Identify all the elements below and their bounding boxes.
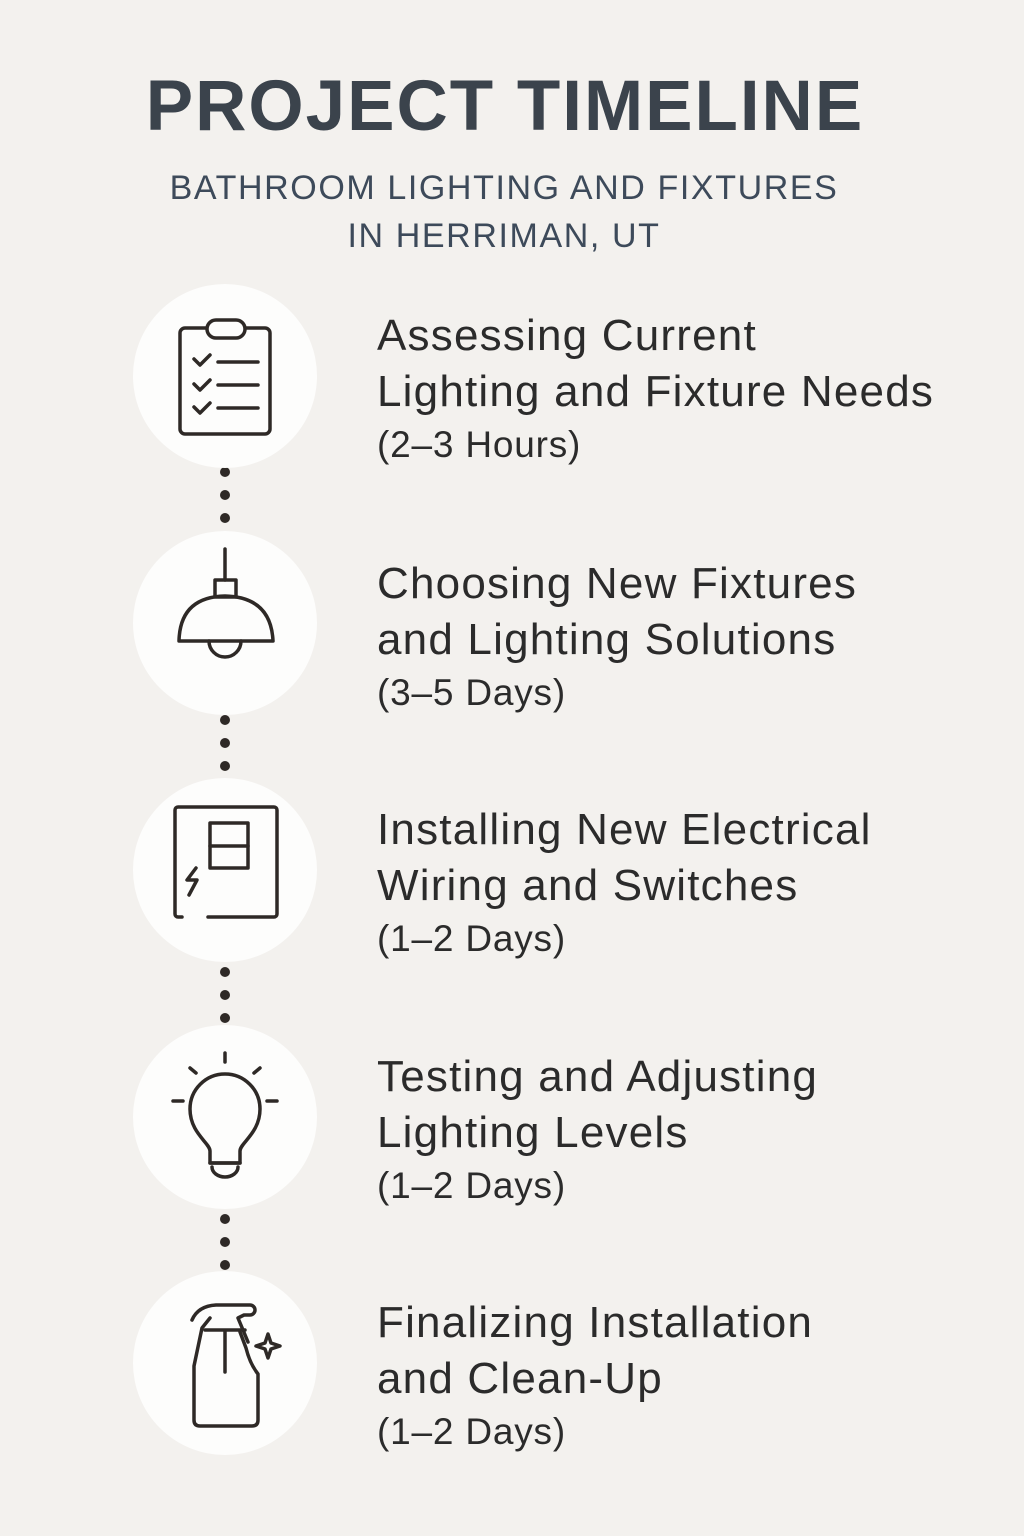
step 4 text: Testing and Adjusting — [377, 1052, 818, 1101]
step 4 text: Lighting Levels — [377, 1108, 689, 1157]
icon: spray bottle — [133, 1271, 317, 1455]
title: PROJECT TIMELINE — [146, 67, 864, 146]
icon: pendant lamp — [133, 531, 317, 715]
icon: light bulb — [133, 1025, 317, 1209]
step 5 text: Finalizing Installation — [377, 1298, 813, 1347]
step 3 text: Wiring and Switches — [377, 861, 798, 910]
step 2 text — [377, 559, 857, 713]
step 3 text: Installing New Electrical — [377, 805, 872, 854]
step 5 text: (1–2 Days) — [377, 1411, 566, 1452]
step 2 text: and Lighting Solutions — [377, 615, 836, 664]
step 1 text — [377, 311, 934, 465]
step 3 text: (1–2 Days) — [377, 918, 566, 959]
icon: light switch — [133, 778, 317, 962]
step 4 text — [377, 1052, 818, 1206]
connector dots — [220, 467, 230, 1270]
step 4 text: (1–2 Days) — [377, 1165, 566, 1206]
step 1 text: Lighting and Fixture Needs — [377, 367, 934, 416]
step 2 text: (3–5 Days) — [377, 672, 566, 713]
subtitle: BATHROOM LIGHTING AND FIXTURES — [170, 169, 838, 207]
step 5 text — [377, 1298, 813, 1452]
step 5 text: and Clean-Up — [377, 1354, 663, 1403]
step 3 text — [377, 805, 872, 959]
step 2 text: Choosing New Fixtures — [377, 559, 857, 608]
icon: clipboard — [133, 284, 317, 468]
step 1 text: Assessing Current — [377, 311, 757, 360]
subtitle — [170, 169, 838, 255]
step 1 text: (2–3 Hours) — [377, 424, 581, 465]
subtitle: IN HERRIMAN, UT — [348, 217, 660, 255]
